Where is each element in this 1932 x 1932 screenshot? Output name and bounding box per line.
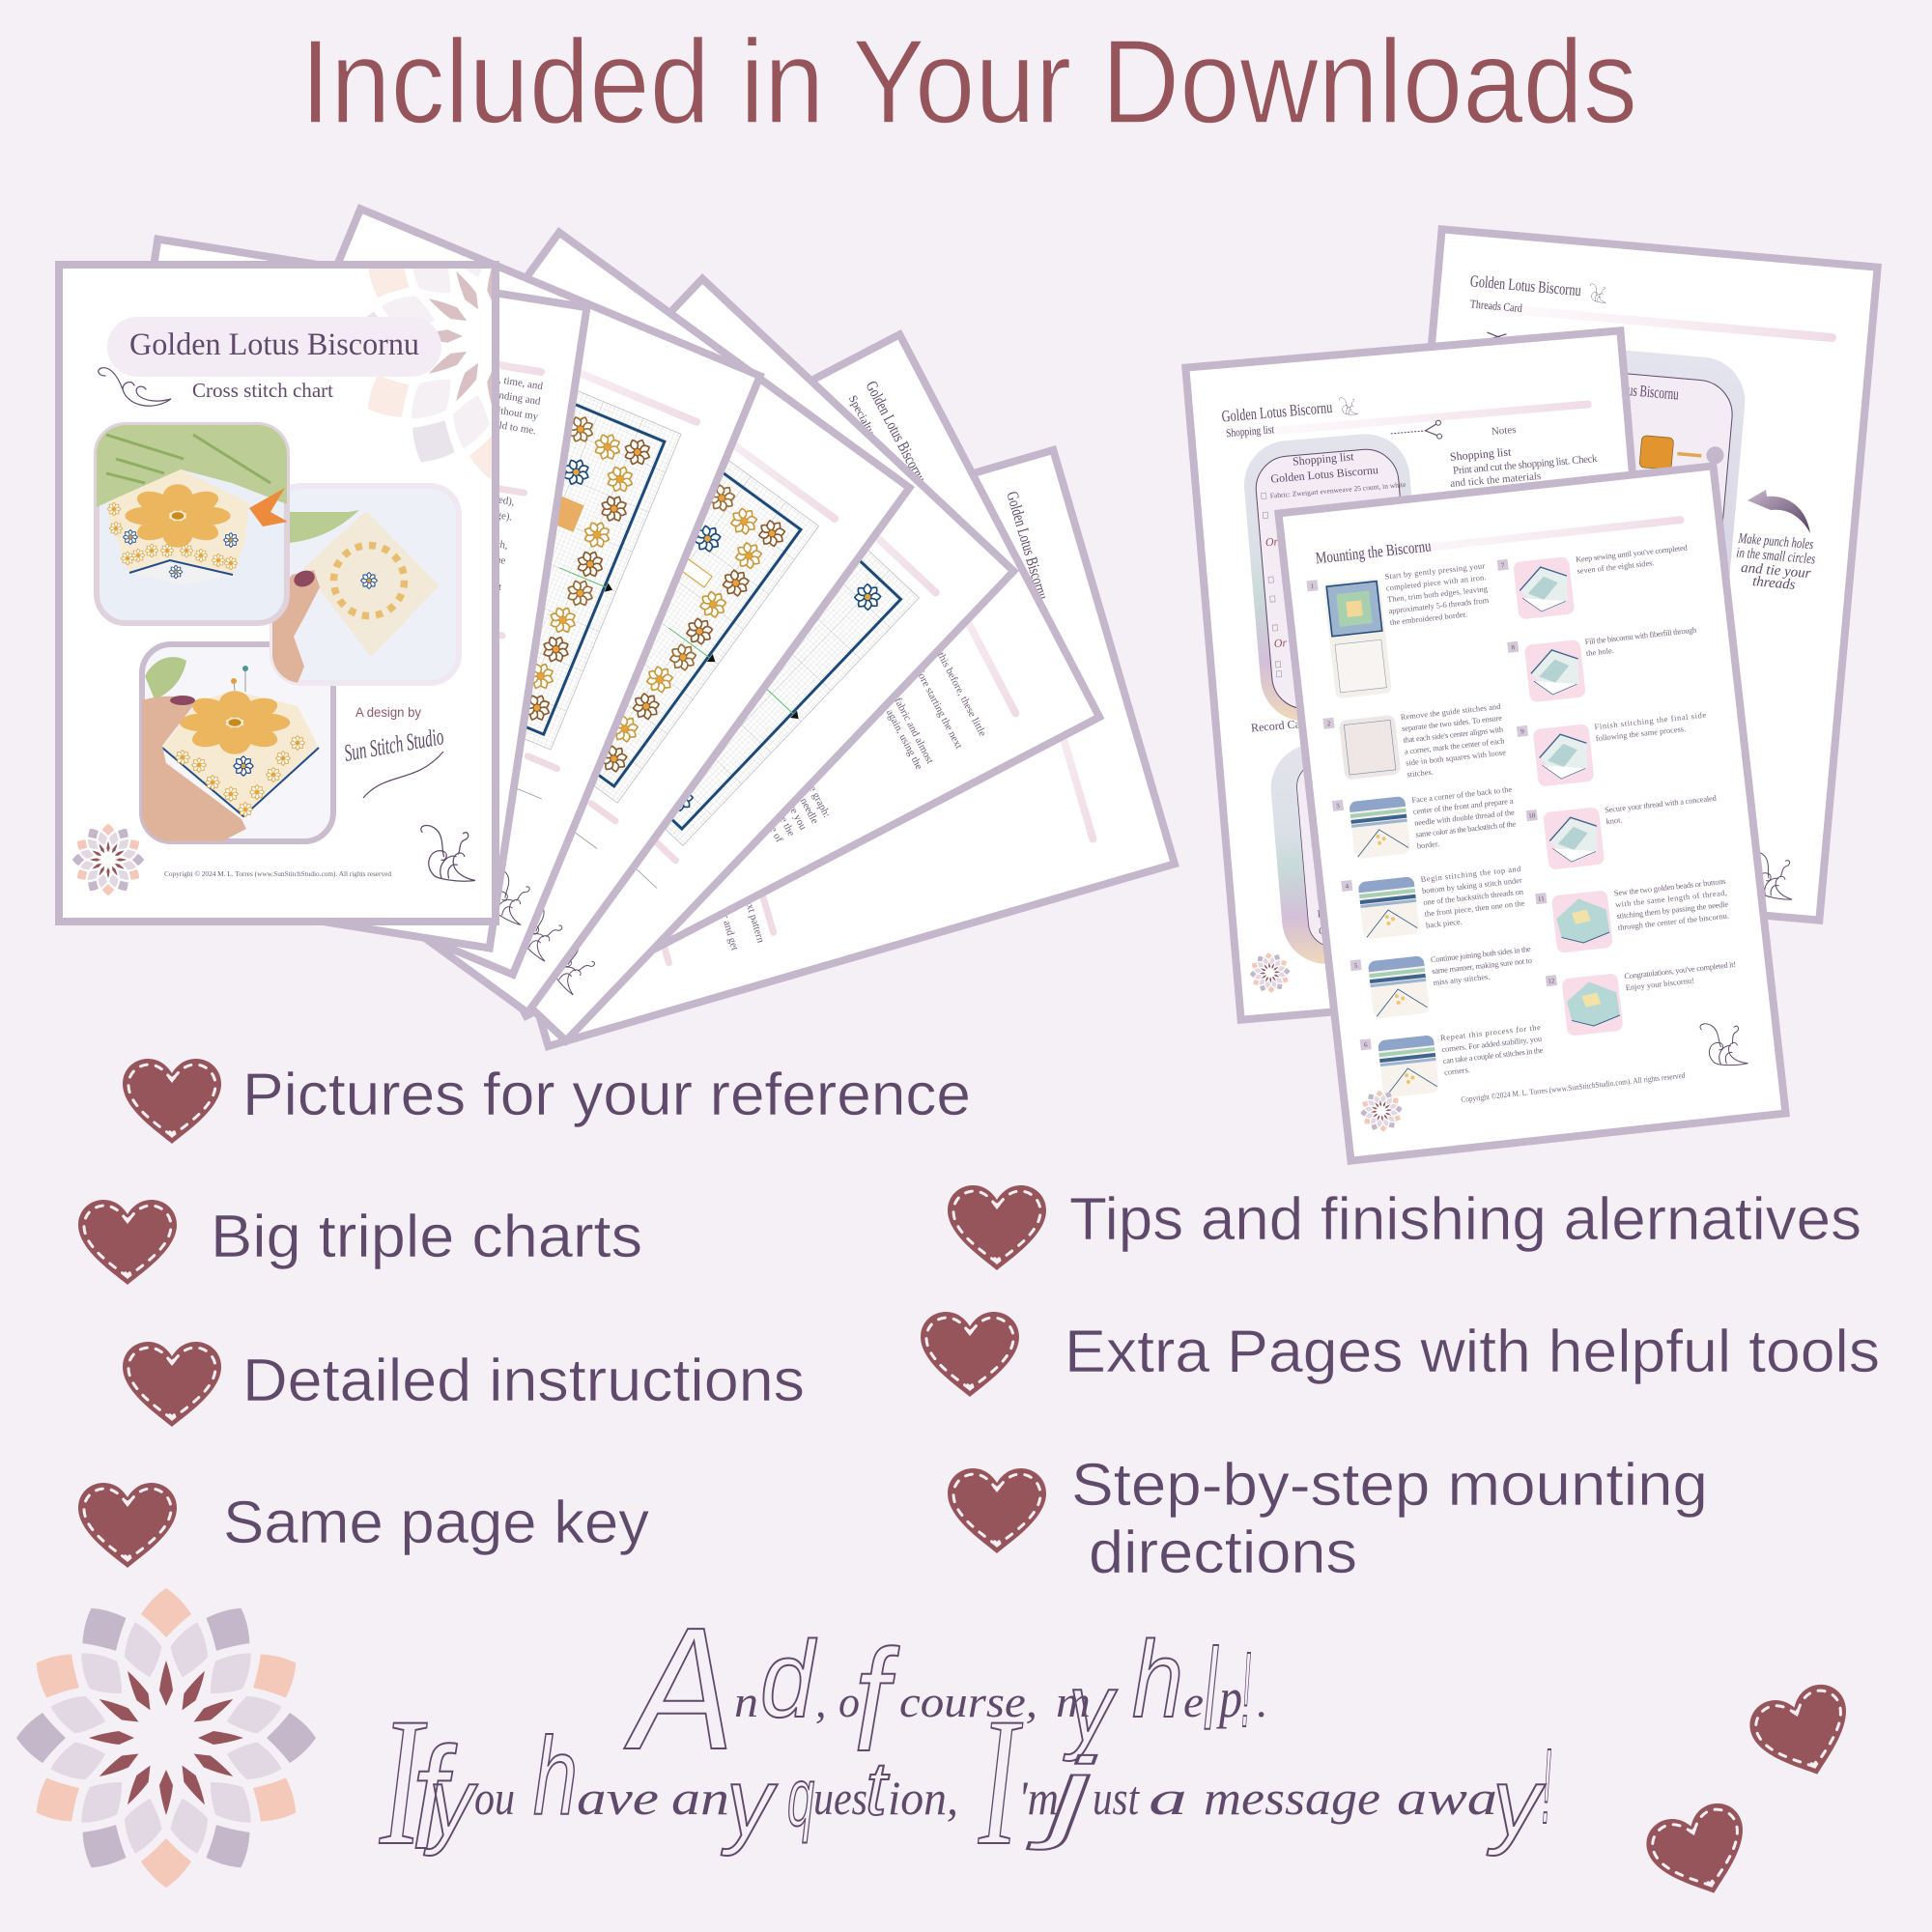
bullet: pictures for your reference <box>123 1059 971 1144</box>
record card: Fabric: <box>1310 823 1341 838</box>
script line 2: ion, <box>888 1771 958 1825</box>
chart grid <box>292 326 681 750</box>
blue corner flowers <box>660 579 888 816</box>
script line 2: q <box>787 1752 814 1844</box>
record card <box>1267 734 1451 968</box>
page 1: cover <box>55 261 499 925</box>
bullet: tips and finishing: Tips and finishing alernatives <box>1069 1186 1861 1253</box>
script line 2: I <box>379 1681 427 1884</box>
page 7: fan back page: Golden Lotus Biscornu <box>1003 490 1052 602</box>
script line 1: e <box>1183 1677 1204 1726</box>
step 9: Finish stitching the final side <box>1594 711 1707 731</box>
step 2: Remove the guide stitches and <box>1400 702 1502 722</box>
photo: biscornu with foliage <box>97 425 288 623</box>
page 2: introduction text page: without my <box>490 404 539 423</box>
script line 2: y <box>1487 1748 1547 1857</box>
copyright: Copyright © 2024 M. L. Torres (www.SunStitchStudio.com). All rights reserved <box>164 869 391 878</box>
step 12: Congratulations, you've completed it! <box>1624 960 1737 980</box>
step 11: through the center of the biscornu. <box>1617 912 1729 932</box>
step 3: center of the front and prepare a <box>1412 797 1514 816</box>
step 3: same color as the backstitch of the <box>1415 819 1517 839</box>
script line 1: o <box>838 1677 860 1726</box>
watermark mandala <box>367 269 492 480</box>
punch holes note <box>1736 531 1816 593</box>
step 6: Repeat this process for the <box>1440 1023 1541 1042</box>
step 2 <box>1322 699 1508 787</box>
shopping list page <box>1185 330 1676 1020</box>
photo: biscornu back <box>270 486 459 683</box>
page 3: flower chart page <box>113 209 760 975</box>
shopping list card <box>1240 431 1430 724</box>
chart flowers <box>459 412 659 724</box>
page 6: fan page: Specialty stitches <box>846 393 895 470</box>
step 1: completed piece with an iron. <box>1385 573 1487 592</box>
page 6: fan page: Golden Lotus Biscornu <box>862 378 930 486</box>
step 2: stitches. <box>1406 768 1434 779</box>
step 8: Fill the biscornu with fiberfill through <box>1584 626 1698 646</box>
page heading <box>1315 509 1685 567</box>
chart grid <box>481 409 919 845</box>
script line 1: d <box>760 1619 817 1740</box>
copyright: Copyright ©2024 M. L. Torres (www.SunStitchStudio.com). All rights reserved <box>1461 1071 1687 1104</box>
step 4 <box>1341 862 1527 942</box>
punch holes arrow <box>1747 490 1810 533</box>
step 9: 9 <box>1520 727 1525 736</box>
script line 2: y <box>721 1748 779 1857</box>
bullet: step-by-step <box>948 1452 1708 1586</box>
bullet: tips and finishing <box>948 1185 1861 1270</box>
script line 1: A <box>624 1592 734 1786</box>
step 10: knot. <box>1605 815 1623 826</box>
step 11: stitching them by passing the needle <box>1616 900 1729 921</box>
threads card page <box>1383 229 1878 921</box>
step 12 <box>1546 955 1742 1038</box>
step 2: a corner, mark the center of each <box>1404 736 1506 756</box>
flourish <box>1700 1019 1748 1068</box>
shopping list page: Shopping list <box>1226 422 1275 440</box>
shopping list card: Or <box>1264 534 1279 549</box>
step 7: 7 <box>1501 561 1505 569</box>
script line 2: awa <box>1397 1771 1497 1825</box>
stack of extra pages <box>1185 229 1878 1161</box>
script line 1: m <box>1056 1677 1091 1726</box>
step 11 <box>1535 873 1732 955</box>
bullet: pictures for your reference: Pictures for your reference <box>242 1062 971 1128</box>
shopping list page: Golden Lotus Biscornu <box>1221 398 1333 426</box>
step 10: 10 <box>1528 811 1536 820</box>
page 6: fan page: the graph: <box>803 777 833 819</box>
step 6: corners. <box>1444 1065 1470 1077</box>
step 2: 2 <box>1326 720 1331 727</box>
photo: biscornu held <box>142 644 333 841</box>
designer credit: A design by <box>355 704 421 720</box>
step 3: Face a corner of the back to the <box>1411 785 1513 805</box>
threads card page: in the marked <box>1695 810 1755 827</box>
script line 2: ave <box>577 1771 659 1825</box>
small mandala <box>72 824 144 895</box>
step 4: 4 <box>1345 882 1350 891</box>
step 12: Enjoy your biscornu! <box>1625 977 1694 992</box>
step 10 <box>1526 790 1723 872</box>
step 1: Start by gently pressing your <box>1384 561 1486 582</box>
step 4: Begin stitching the top and <box>1420 865 1522 884</box>
punch holes note: Make punch holes <box>1737 531 1814 553</box>
step 5: Continue joining both sides in the <box>1431 945 1531 964</box>
step 10: Secure your thread with a concealed <box>1605 794 1718 814</box>
script line 2: h <box>533 1716 578 1838</box>
shopping list page: Notes <box>1491 424 1517 438</box>
chart flowers <box>542 479 794 777</box>
page 2: introduction text page: hart <box>484 580 502 593</box>
step 1: Then, trim both edges, leaving <box>1387 584 1489 604</box>
script line 2: j <box>1027 1738 1096 1851</box>
page 6: fan page <box>327 334 1099 1016</box>
step 2: side in both squares with loose <box>1406 748 1507 768</box>
step 4: the front piece, then one on the <box>1424 899 1525 919</box>
closing script message <box>379 1592 1551 1884</box>
bullet: extra pages <box>921 1312 1880 1397</box>
record card: Gifted <box>1319 923 1347 937</box>
step 1: 1 <box>1310 582 1315 590</box>
small mandala <box>1358 1088 1405 1134</box>
mounting the biscornu page <box>1278 466 1786 1161</box>
step 4: bottom by taking a stitch under <box>1422 876 1522 895</box>
bullet: extra pages: Extra Pages with helpful tools <box>1065 1319 1880 1385</box>
threads card: Golden Lotus Biscornu <box>1577 377 1680 404</box>
shopping list card: Or <box>1273 636 1288 650</box>
page 6: fan page: before starting the next <box>909 660 965 751</box>
designer credit <box>342 704 445 798</box>
chart grid <box>390 360 819 803</box>
page 4: flower chart page <box>178 233 909 1012</box>
step 5: same manner, making sure not to <box>1432 956 1532 976</box>
script line 1: . <box>1257 1677 1267 1726</box>
page 6: fan page: e of <box>767 825 785 844</box>
page 6: fan page: needle <box>798 796 821 826</box>
script line 2: t <box>866 1746 890 1831</box>
step 6: corners. For added stability, you <box>1441 1035 1543 1054</box>
step 3 <box>1332 781 1518 861</box>
fan of chart pages <box>59 191 1175 1046</box>
record card: Pattern: <box>1307 790 1341 805</box>
step 2: separate the two sides. To ensure <box>1402 714 1503 733</box>
bullet: step-by-step: Step-by-step mounting <box>1071 1452 1708 1519</box>
script line 2: 'm <box>1018 1771 1059 1825</box>
record card: Pattern <box>1317 906 1349 921</box>
page 2: introduction text page: used), <box>489 493 516 508</box>
title: Included in Your Downloads <box>300 16 1637 149</box>
shopping list card: Shopping list <box>1292 449 1355 469</box>
bullet: same page key <box>78 1483 649 1568</box>
text: ! <box>1542 1727 1551 1846</box>
script line 2: f <box>412 1717 457 1879</box>
page 6: fan page: re you <box>786 803 810 833</box>
page 7: fan back page: ter and get <box>717 906 741 952</box>
script line 2: ues <box>813 1771 867 1825</box>
designer credit: Sun Stitch Studio <box>342 724 445 767</box>
bullet: step-by-step: directions <box>1089 1520 1357 1586</box>
page 6: fan page: fabric and almost <box>892 696 936 766</box>
script line 2 <box>379 1681 1551 1884</box>
step 12: 12 <box>1548 977 1555 985</box>
page 2: introduction text page: effort, time, and <box>475 370 544 392</box>
threads card page: Threads Card <box>1469 297 1522 315</box>
step 11: 11 <box>1538 895 1546 903</box>
script line 1: course, <box>899 1677 1037 1726</box>
script line 2: ust <box>1093 1771 1140 1825</box>
page 2: introduction text page: world to me. <box>482 417 537 437</box>
script line 2: message <box>1204 1771 1380 1825</box>
script line 2: y <box>423 1748 479 1857</box>
step 6 <box>1360 1020 1548 1100</box>
decorative heart <box>1639 1797 1761 1909</box>
flourish <box>99 368 171 406</box>
step 3: 3 <box>1336 802 1341 810</box>
step 8: the hole. <box>1586 646 1614 658</box>
page 6: fan page: again, using the <box>884 707 924 772</box>
bullet: big triple charts <box>78 1200 642 1285</box>
page heading: Mounting the Biscornu <box>1315 536 1433 567</box>
bullet: detailed instructions <box>123 1342 805 1427</box>
script line 2: a <box>1149 1771 1187 1825</box>
step 7 <box>1497 539 1694 621</box>
step 5: 5 <box>1353 961 1358 970</box>
step 7: seven of the eight sides. <box>1577 558 1655 576</box>
page 2: introduction text page: page). <box>486 508 513 524</box>
step 3: needle with double thread of the <box>1414 808 1516 828</box>
script line 1: y <box>1063 1654 1119 1762</box>
step 8: 8 <box>1511 643 1516 651</box>
step 1 <box>1306 561 1498 700</box>
step 9: following the same process. <box>1595 724 1687 743</box>
step 1: the embroidered border. <box>1389 610 1467 627</box>
step 8 <box>1507 622 1703 704</box>
bullet: detailed instructions: Detailed instructions <box>242 1348 805 1414</box>
script line 2: an <box>671 1771 729 1825</box>
script line 1: , <box>815 1677 827 1726</box>
page 6: fan page: done this before, these little <box>924 630 988 739</box>
shopping list card: Fabric: Zweigart evenweave 25 count, in white <box>1269 480 1406 500</box>
bullet: big triple charts: Big triple charts <box>211 1204 642 1270</box>
step 11: with the same length of thread, <box>1615 889 1727 909</box>
record card: Threads: <box>1311 839 1350 855</box>
step 1: approximately 5-6 threads from <box>1388 596 1490 615</box>
shopping list page: Shopping list <box>1449 444 1513 464</box>
step 6: 6 <box>1364 1041 1368 1049</box>
page 7: fan back page <box>427 450 1175 1046</box>
threads card page: Golden Lotus Biscornu <box>1469 271 1582 299</box>
decorative heart <box>1743 1678 1864 1790</box>
shopping list page: Record Card <box>1251 716 1310 734</box>
page 5: border chart page <box>255 279 1013 1040</box>
page 7: fan back page: next pattern <box>741 894 767 945</box>
page 2: introduction text page: understanding and <box>463 384 542 408</box>
shopping list page: Print and cut the shopping list. Check <box>1453 453 1599 477</box>
step 2: that each side's center aligns with <box>1403 725 1504 745</box>
punch holes note: in the small circles <box>1736 545 1816 568</box>
page 2: introduction text page: inch, <box>486 537 509 552</box>
script line 1: p <box>1216 1666 1242 1729</box>
page 2: introduction text page: e the <box>485 553 506 567</box>
page 2: introduction text page <box>61 240 586 948</box>
script line 1 <box>624 1592 1267 1786</box>
step 9 <box>1517 706 1713 788</box>
cover subtitle: Cross stitch chart <box>192 379 333 402</box>
threads card <box>1474 341 1748 824</box>
cover title pill <box>107 317 441 377</box>
large mandala <box>16 1588 316 1888</box>
script line 1: f <box>854 1619 899 1781</box>
step 5: miss any stitches. <box>1433 973 1491 987</box>
punch holes note: and tie your <box>1741 560 1811 582</box>
shopping list page: and tick the materials <box>1450 470 1542 490</box>
bullet: same page key: Same page key <box>223 1490 649 1556</box>
script line 1: n <box>734 1677 758 1726</box>
script line 1: ! <box>1241 1631 1251 1749</box>
shopping list card: Golden Lotus Biscornu <box>1270 463 1378 486</box>
script line 1: l <box>1204 1625 1219 1754</box>
punch holes note: threads <box>1752 574 1796 593</box>
step 3: border. <box>1416 839 1440 851</box>
page 6: fan page: e the <box>778 815 797 838</box>
step 6: can take a couple of stitches in the <box>1442 1046 1544 1065</box>
script line 2: ou <box>474 1771 515 1825</box>
step 4: back piece. <box>1426 918 1463 930</box>
script line 1: h <box>1132 1619 1183 1740</box>
script line 2: I <box>978 1681 1023 1884</box>
step 7: Keep sewing until you've completed <box>1576 543 1689 564</box>
step 11: Sew the two golden beads or buttons <box>1613 877 1726 897</box>
flourish <box>421 825 475 881</box>
step 5 <box>1350 941 1537 1021</box>
step 4: one of the backstitch threads on <box>1423 888 1524 907</box>
cover title pill: Golden Lotus Biscornu <box>129 327 419 362</box>
